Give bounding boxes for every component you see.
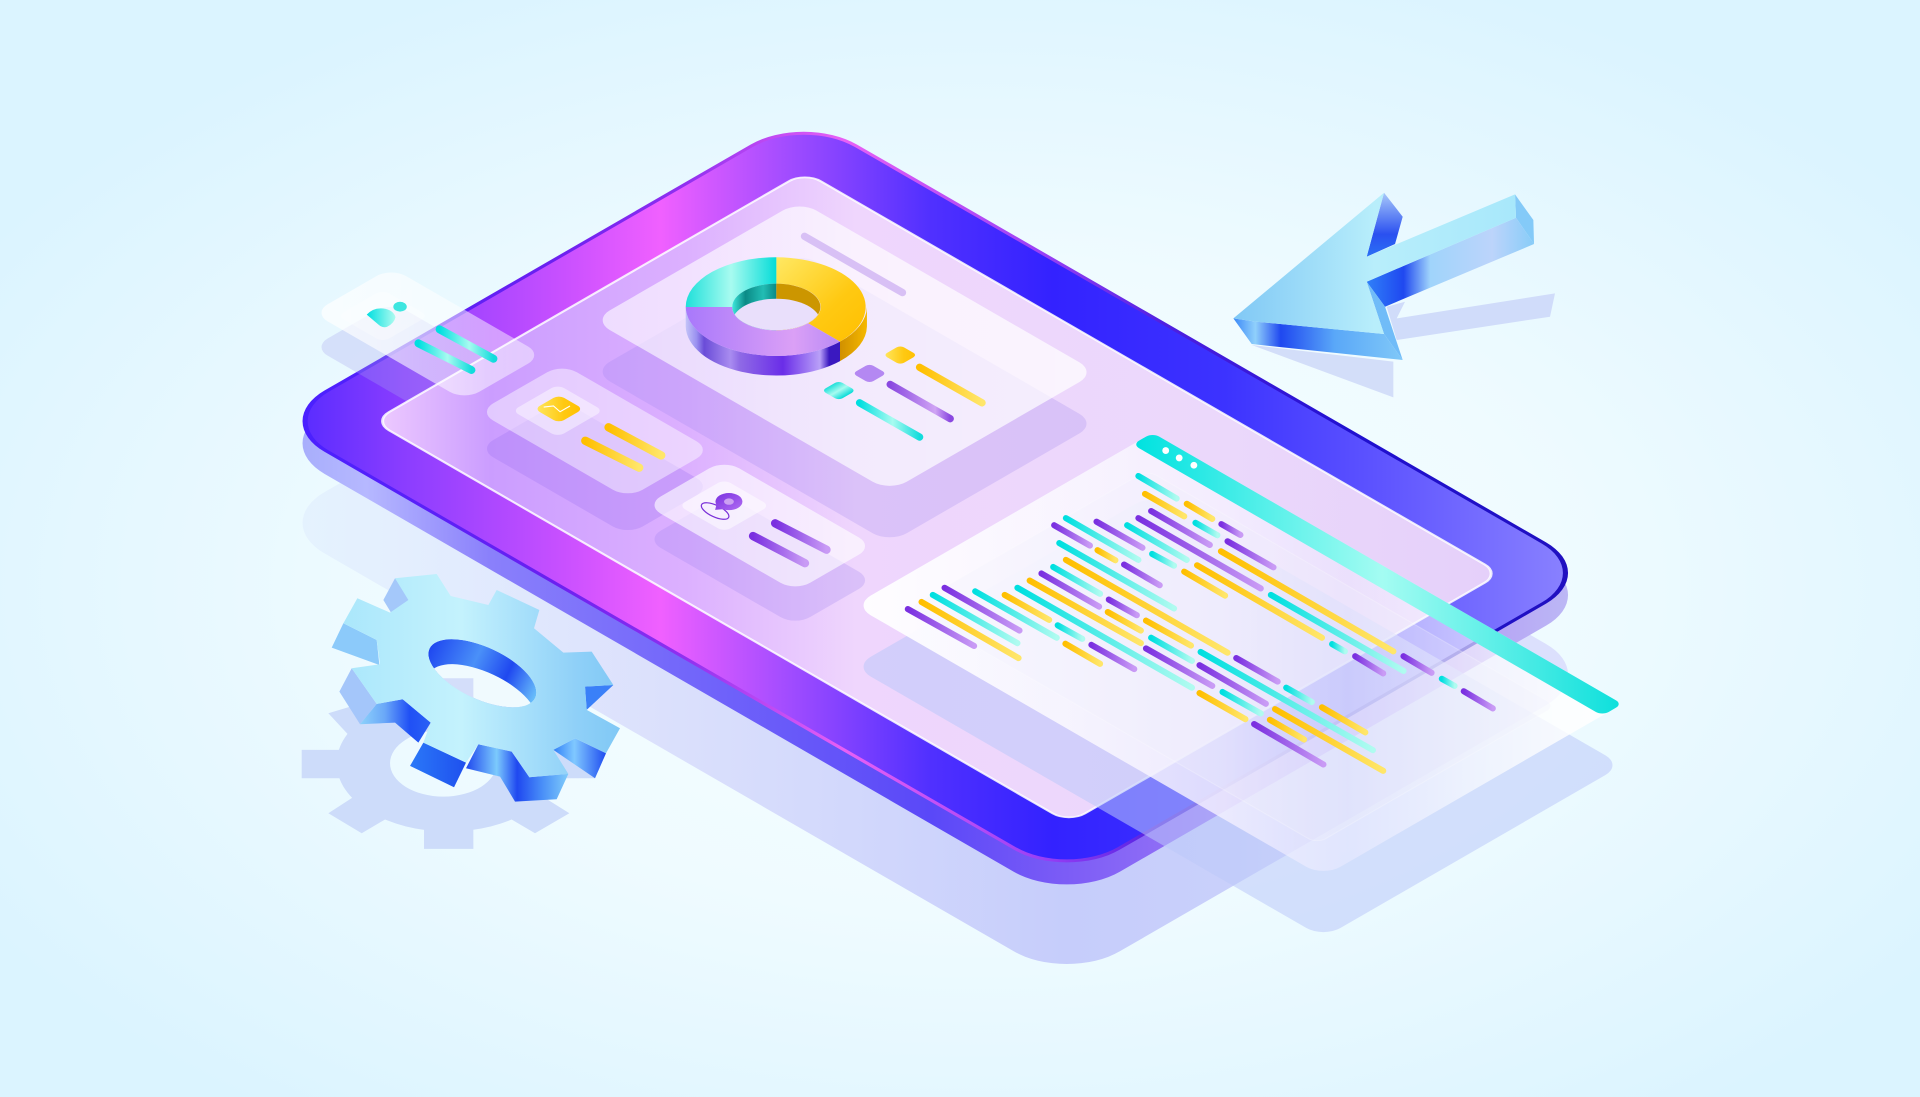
icon: gear [332,574,620,802]
map card shadow [646,494,874,626]
map card tile [679,479,770,532]
panel: user card [313,268,543,400]
tablet side wall [271,136,1599,902]
donut card surface [593,201,1096,492]
panel: code window [854,433,1622,938]
icon: yellow line chart [534,395,583,423]
tablet shadow [271,215,1599,982]
tablet rim and top face [271,114,1599,880]
window control dots [1162,447,1197,469]
map card bars [753,523,827,563]
user card shadow [313,302,543,435]
chart card shadow [478,400,712,535]
panel: donut chart card [593,201,1096,543]
panel: chart card [478,364,712,535]
legend: yellow [883,345,982,403]
legend: purple [853,364,950,419]
code lines: yellow [922,494,1393,771]
code lines: cyan [933,476,1455,750]
code window shadow [854,494,1622,938]
panel: map card [646,460,874,626]
icon: gear shadow [302,678,595,849]
user card surface [313,268,543,400]
user card bars [418,329,493,370]
chart card surface [478,364,712,498]
icon: user avatar [367,302,407,327]
code window header bar [1133,433,1622,716]
donut chart [686,257,867,376]
icon: location pin [699,493,742,523]
tablet body [271,114,1599,902]
map card surface [646,460,874,591]
tablet inner screen [373,172,1500,823]
chart card tile [512,384,603,437]
legend: cyan [822,381,920,437]
donut card shadow [593,252,1096,543]
icon: cursor arrow [1233,193,1555,397]
code lines: purple [908,511,1493,764]
chart card bars [585,427,661,468]
code window glass [854,433,1622,877]
donut card title bar [804,236,902,293]
